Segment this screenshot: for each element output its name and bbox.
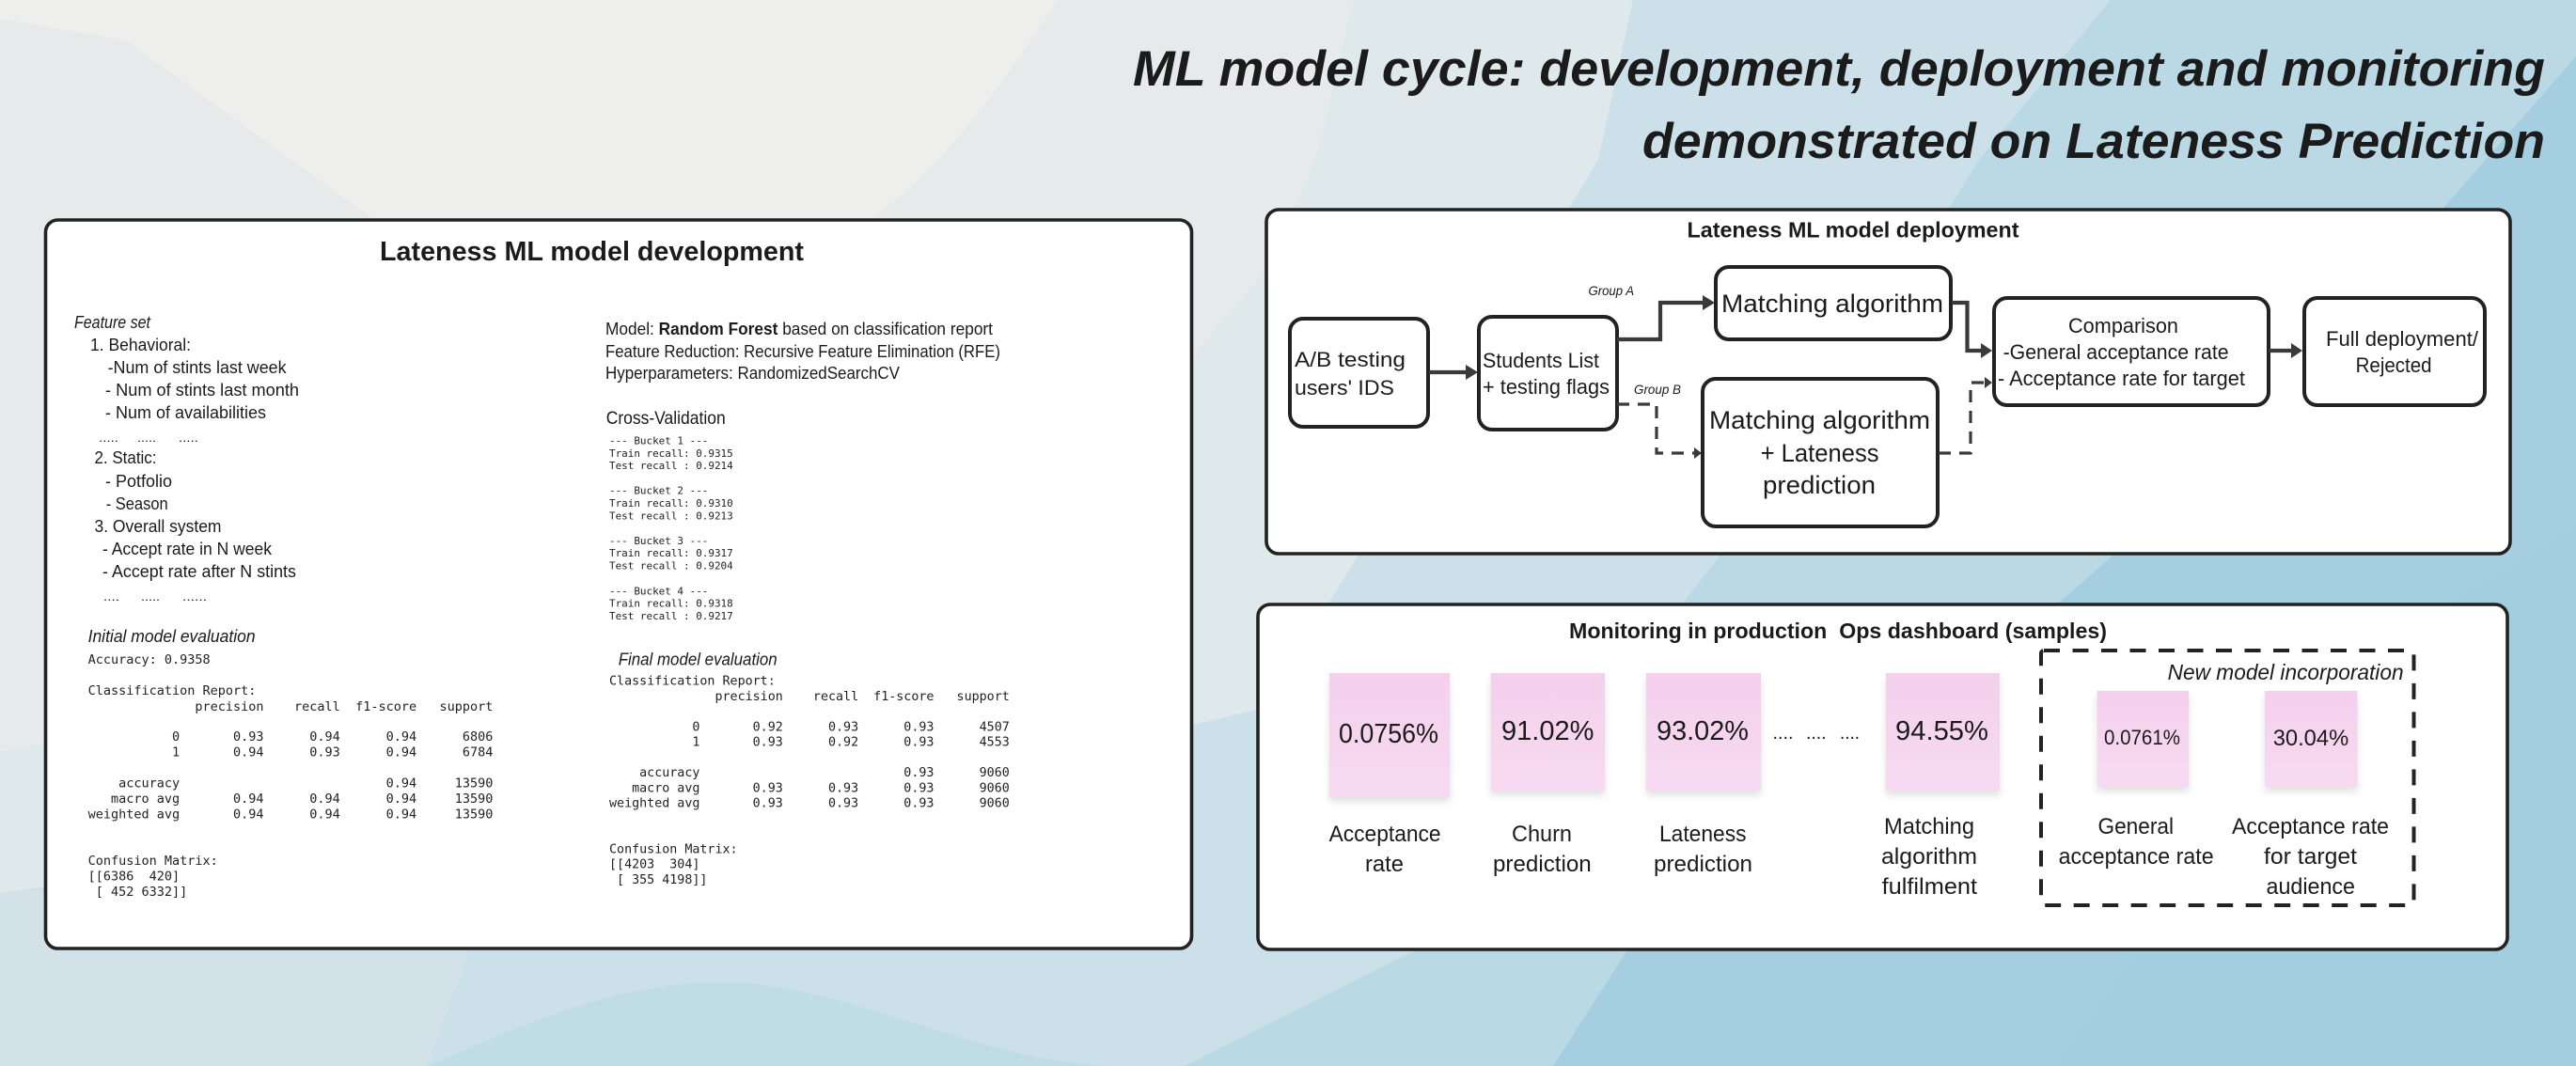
metric: churn prediction: 91.02% [1501,716,1594,746]
box: students list: + testing flags [1483,375,1610,399]
box: full deployment [2304,298,2485,405]
box: comparison: Comparison [2068,314,2178,337]
arrow: prediction to comparison [1939,377,1992,453]
text block: initial model evaluation: [[6386 420] [88,869,180,884]
metric: acceptance rate for target audience: audience [2266,874,2355,900]
title: ML model cycle: development, deployment and monitoring [1133,41,2545,97]
text block: feature set: ..... [137,431,156,445]
panel: monitoring [1258,604,2507,949]
ellipsis dots: .... [1806,723,1826,744]
ellipsis dots [1773,723,1860,744]
text block: final model evaluation: 1 0.93 0.92 0.93 4553 [609,736,1010,750]
ellipsis dots: .... [1840,723,1860,744]
text block: final model evaluation: Classification Report: [609,675,776,689]
box: A/B testing [1290,319,1428,427]
metric: acceptance rate: rate [1365,852,1404,877]
text block: feature set: - Num of stints last month [105,380,299,400]
text block: feature set: - Num of availabilities [105,402,266,422]
text block: model choice [605,319,1000,383]
arrow: matching algorithm to comparison [1952,303,1992,358]
text block: feature set: ...... [182,589,207,604]
text block: feature set: 1. Behavioral: [90,335,191,354]
arrow: group B to matching with prediction [1617,404,1702,459]
label: group B: Group B [1634,382,1681,397]
text block: initial model evaluation: Accuracy: 0.9358 [88,652,211,667]
text block: cross-validation: Test recall : 0.9204 [609,560,733,572]
metric: acceptance rate [1329,673,1450,877]
box: full deployment: Rejected [2356,353,2432,377]
box: full deployment: Full deployment/ [2326,327,2479,351]
text block: feature set: ..... [141,589,160,604]
text block: cross-validation [606,408,733,622]
box: A/B testing: A/B testing [1295,348,1406,371]
text block: initial model evaluation: macro avg 0.94 0.94 0.94 13590 [88,792,493,807]
arrow: group A to matching algorithm [1617,295,1715,339]
metric: general acceptance rate: acceptance rate [2059,844,2214,870]
box: comparison: - Acceptance rate for target [1998,367,2245,390]
metric: acceptance rate for target audience: for target [2264,844,2357,870]
text block: feature set: -Num of stints last week [108,357,287,377]
text block: cross-validation: Train recall: 0.9315 [609,447,733,460]
metric: matching algorithm fulfilment: fulfilment [1882,874,1977,900]
text block: initial model evaluation: 1 0.94 0.93 0.94 6784 [88,745,493,760]
panel: model development [45,220,1192,948]
text block: final model evaluation: macro avg 0.93 0.93 0.93 9060 [609,781,1010,795]
metric: acceptance rate for target audience: Acceptance rate [2232,814,2389,839]
text block: initial model evaluation: accuracy 0.94 13590 [88,776,493,792]
text block: feature set: Feature set [74,312,151,332]
text block: final model evaluation: 0 0.92 0.93 0.93 4507 [609,720,1010,734]
panel: model deployment [1266,210,2510,554]
text block: final model evaluation: accuracy 0.93 9060 [609,766,1010,780]
text block: model choice: Model: Random Forest based on classification report [605,319,993,338]
text block: initial model evaluation [88,626,493,900]
metric: acceptance rate: 0.0756% [1339,719,1438,749]
metric: churn prediction [1491,673,1605,877]
metric: churn prediction: prediction [1493,852,1592,877]
box: matching algorithm: Matching algorithm [1721,290,1943,318]
text block: model choice: Feature Reduction: Recursive Feature Elimination (RFE) [605,341,1000,361]
label: group A: Group A [1589,283,1634,298]
box: matching algorithm plus lateness prediction: prediction [1763,471,1876,499]
text block: final model evaluation: Final model evaluation [619,649,778,668]
box: comparison [1994,298,2269,405]
metric: acceptance rate for target audience: 30.04% [2273,726,2348,751]
text block: feature set: ..... [179,431,198,445]
heading: development: Lateness ML model development [380,237,804,267]
metric: churn prediction: Churn [1512,822,1572,847]
metric: lateness prediction: Lateness [1659,822,1747,847]
arrow: comparison to full deployment [2269,343,2302,358]
box: matching algorithm plus lateness prediction [1703,379,1938,526]
callout: new model incorporation [2041,651,2414,905]
arrow: A/B testing to students list [1429,365,1478,380]
metric: acceptance rate for target audience [2232,691,2389,900]
text block: final model evaluation: precision recall f1-score support [609,690,1010,704]
text block: final model evaluation: weighted avg 0.93 0.93 0.93 9060 [609,797,1010,811]
label: new model incorporation: New model incorporation [2168,660,2404,684]
title [1133,41,2545,169]
text block: initial model evaluation: [ 452 6332]] [88,885,187,900]
metric: general acceptance rate [2059,691,2214,870]
text block: initial model evaluation: 0 0.93 0.94 0.94 6806 [88,729,493,745]
box: matching algorithm [1716,267,1951,339]
text block: initial model evaluation: Classification Report: [88,683,256,698]
text block: final model evaluation: [[4203 304] [609,858,699,872]
text block: feature set: .... [103,589,119,604]
text block: cross-validation: Test recall : 0.9214 [609,460,733,472]
box: comparison: -General acceptance rate [2003,340,2229,364]
text block: cross-validation: Train recall: 0.9317 [609,547,733,559]
box: students list [1479,317,1617,430]
box: A/B testing: users' IDS [1295,376,1394,400]
text block: cross-validation: --- Bucket 1 --- [609,435,708,447]
text block: feature set: - Potfolio [105,471,172,491]
text block: cross-validation: --- Bucket 3 --- [609,535,708,547]
text block: cross-validation: Cross-Validation [606,408,726,429]
text block: initial model evaluation: precision recall f1-score support [88,699,493,714]
text block: feature set: ..... [99,431,118,445]
text block: initial model evaluation: weighted avg 0.94 0.94 0.94 13590 [88,807,493,822]
box: students list: Students List [1483,349,1599,372]
text block: cross-validation: --- Bucket 4 --- [609,585,708,598]
metric: general acceptance rate: 0.0761% [2104,726,2180,749]
text block: feature set: - Accept rate after N stints [102,561,296,581]
metric: matching algorithm fulfilment: 94.55% [1895,716,1988,746]
text block: cross-validation: --- Bucket 2 --- [609,485,708,497]
heading: deployment: Lateness ML model deployment [1687,218,2019,243]
box: matching algorithm plus lateness prediction: + Lateness [1761,439,1879,467]
ellipsis dots: .... [1773,723,1794,744]
text block: feature set: 3. Overall system [94,516,222,536]
text block: cross-validation: Test recall : 0.9213 [609,509,733,522]
metric: lateness prediction [1646,673,1761,877]
title: demonstrated on Lateness Prediction [1642,114,2545,169]
text block: feature set [74,312,299,604]
text block: cross-validation: Train recall: 0.9310 [609,497,733,509]
text block: feature set: - Season [106,494,168,513]
text block: cross-validation: Train recall: 0.9318 [609,598,733,609]
text block: feature set: 2. Static: [94,447,156,467]
metric: lateness prediction: prediction [1654,852,1752,877]
metric: acceptance rate: Acceptance [1329,822,1441,847]
text block: cross-validation: Test recall : 0.9217 [609,610,733,622]
metric: general acceptance rate: General [2098,814,2174,839]
text block: initial model evaluation: Initial model evaluation [88,626,256,646]
metric: matching algorithm fulfilment: Matching [1884,814,1974,839]
text block: final model evaluation: [ 355 4198]] [609,873,707,887]
text block: model choice: Hyperparameters: RandomizedSearchCV [605,363,901,383]
text block: final model evaluation [609,649,1010,887]
metric: lateness prediction: 93.02% [1657,716,1749,746]
text block: initial model evaluation: Confusion Matrix: [88,854,218,869]
heading: monitoring: Monitoring in production Ops dashboard (samples) [1569,619,2107,643]
metric: matching algorithm fulfilment: algorithm [1881,844,1977,870]
metric: matching algorithm fulfilment [1881,673,2000,900]
text block: feature set: - Accept rate in N week [102,539,273,558]
box: matching algorithm plus lateness prediction: Matching algorithm [1709,406,1930,434]
text block: final model evaluation: Confusion Matrix: [609,842,738,856]
